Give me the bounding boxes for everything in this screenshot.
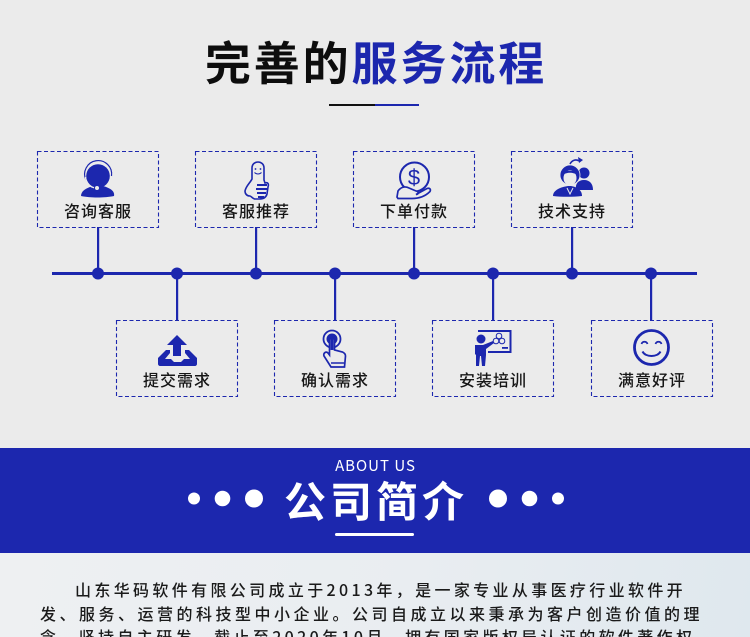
intro paragraph: 山东华码软件有限公司成立于2013年，是一家专业从事医疗行业软件开 [75,577,686,601]
icon: coin in hand: $ [408,165,420,190]
intro paragraph: 发、服务、运营的科技型中小企业。公司自成立以来秉承为客户创造价值的理 [40,601,703,625]
label: 确认需求 [301,367,369,391]
label: 安装培训 [459,367,527,391]
icon: upload tray [158,335,197,366]
step: 确认需求 [274,320,396,397]
icon: coin in hand [396,162,432,200]
label: 客服推荐 [222,198,290,222]
label: 技术支持 [538,198,606,222]
icon: support staff [553,157,593,197]
label: 下单付款 [380,198,448,222]
label: 满意好评 [618,367,686,391]
step: 提交需求 [116,320,238,397]
step: 下单付款 [352,151,476,228]
step: 技术支持 [510,151,634,228]
banner underline [335,533,414,536]
icon: headset agent [81,160,114,198]
section banner: about us [0,448,750,553]
decorative dots [188,490,564,508]
icon: tapping hand [322,330,346,368]
banner subtitle: ABOUT US [335,455,416,476]
panel: company introduction [0,553,750,637]
banner heading: 公司简介 [284,469,468,530]
icon: trainer at whiteboard [475,330,512,366]
step: 满意好评 [590,320,714,397]
step: 客服推荐 [194,151,318,228]
label: 咨询客服 [64,198,132,222]
connectors and nodes [92,227,657,321]
icon: smiley face [633,329,670,366]
icon: thumbs up [244,161,270,200]
title underline [329,104,419,106]
title: 完善的服务流程 [205,28,547,94]
label: 提交需求 [143,367,211,391]
timeline axis [52,272,697,275]
intro paragraph [40,577,703,637]
timeline [52,227,697,320]
step: 咨询客服 [36,151,160,228]
step: 安装培训 [432,320,554,397]
